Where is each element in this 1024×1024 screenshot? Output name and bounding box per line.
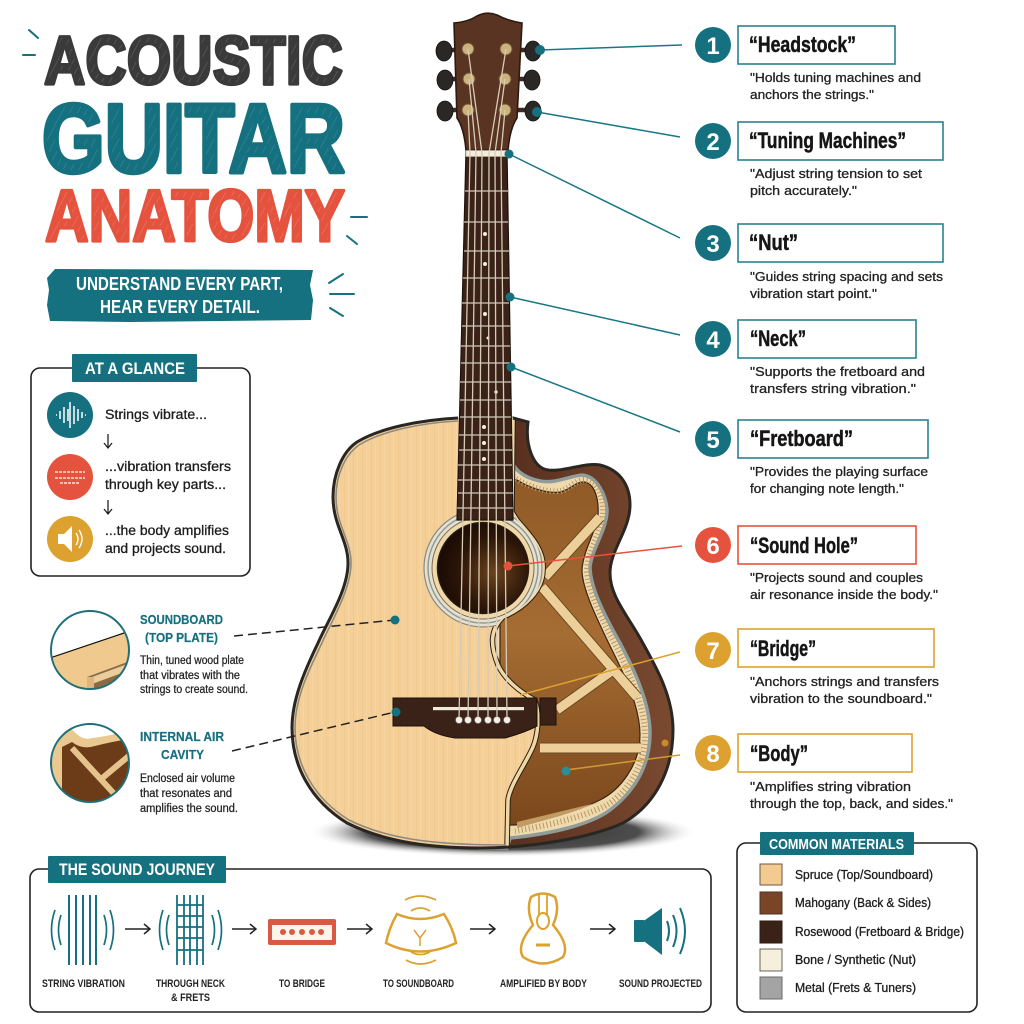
panel frame [30,869,711,1012]
lining kerf ticks [515,479,645,831]
icon: vibration transfer [47,454,93,500]
frets [457,191,513,508]
description: vibration to the soundboard." [750,691,932,706]
cavity description: Enclosed air volume [140,773,235,785]
dashed leader soundboard [234,620,395,636]
heading box [738,224,943,262]
arrow 2 [232,924,256,934]
heading: “Body” [750,741,808,766]
text: body amplifies: ...the body amplifies [105,523,229,538]
part 2: tuning machines [695,122,943,198]
swatch: metal: Metal (Frets & Tuners) [795,981,916,995]
detail ring [51,611,129,689]
soundboard cut edge [493,418,543,848]
tagline banner [47,269,313,322]
leader 6 [508,546,682,566]
soundboard heading: (TOP PLATE) [145,631,218,645]
banner text: UNDERSTAND EVERY PART, [76,274,283,294]
strings [459,49,507,720]
heading: “Fretboard” [750,426,853,451]
text: body amplifies: and projects sound. [105,541,226,556]
tuner knobs [436,41,541,121]
guitar body back and sides [292,418,673,848]
neck and fretboard [457,150,513,520]
number badge [695,27,731,63]
swatch: rosewood [760,921,964,943]
icon: string vibration [52,895,114,965]
arrow 5 [590,924,615,934]
soundboard description: Thin, tuned wood plate [140,655,244,667]
leader 7 [520,652,680,695]
banner accent ticks [329,274,354,316]
heading: “Sound Hole” [750,533,858,558]
label: through neck and frets: & FRETS [171,992,210,1004]
label: to soundboard: TO SOUNDBOARD [383,978,454,990]
description: "Adjust string tension to set [750,166,922,181]
description: "Supports the fretboard and [750,364,925,379]
part 3: nut [695,224,944,301]
leader 3 [509,154,680,238]
panel: the sound journey [30,856,711,1012]
title accent ticks [23,30,367,244]
cavity heading: CAVITY [161,748,205,762]
icon: speaker [634,908,685,955]
number badge: 8 [706,741,720,768]
icon: soundboard detail [52,632,128,688]
banner shape [47,269,313,322]
arrow 4 [470,924,495,934]
label: string vibration: STRING VIBRATION [42,978,125,990]
panel: common materials [737,832,977,1012]
icon: sound wave [47,392,93,438]
number badge: 5 [706,427,720,454]
number badge: 7 [706,638,720,665]
arrow down 2 [104,500,112,514]
heading tab [48,856,226,883]
back strip at bottom [517,802,600,828]
heading tab [760,832,914,855]
leader 2 [537,112,680,137]
part 4: neck [695,320,925,396]
number badge [695,735,731,771]
spruce soundboard [292,418,543,848]
leader 5 [511,367,680,432]
sound hole rosette [424,509,542,627]
arrow 1 [125,924,150,934]
part 1: headstock [695,26,921,102]
title line: ACOUSTIC: ACOUSTIC [44,22,343,99]
detail ring [51,724,129,802]
swatch: mahogany [760,892,931,914]
number badge [695,527,731,563]
leader 8 [566,755,680,770]
description: "Anchors strings and transfers [750,674,940,689]
swatch: metal [760,977,916,999]
headstock [436,13,541,150]
heading tab [72,354,197,382]
nut [466,150,508,156]
description: through the top, back, and sides." [750,796,953,811]
tuner shafts [452,50,525,110]
fret markers [482,232,498,461]
arrow 3 [347,924,372,934]
icon: soundboard [386,896,456,964]
number badge [695,123,731,159]
leader 1 [540,45,682,50]
interior cavity [500,478,640,825]
label: amplified by body: AMPLIFIED BY BODY [500,978,588,990]
heading box [738,734,912,772]
cavity heading: INTERNAL AIR [140,730,224,744]
description: for changing note length." [750,481,904,496]
leader 4 [510,297,680,335]
headstock plate [454,13,522,150]
soundboard description: that vibrates with the [140,670,240,682]
bridge pins [456,717,510,723]
description: "Holds tuning machines and [750,70,921,85]
cavity description: that resonates and [140,788,232,800]
bridge [393,698,556,738]
number badge: 1 [706,33,720,60]
cavity description: amplifies the sound. [140,803,238,815]
number badge [695,632,731,668]
number badge: 4 [706,327,720,354]
banner text: HEAR EVERY DETAIL. [100,297,260,317]
heading: “Headstock” [749,32,856,57]
swatch: spruce [760,864,933,885]
heading: “Bridge” [750,636,816,661]
heading: “Neck” [750,326,806,351]
leader dots [390,45,668,776]
description: "Provides the playing surface [750,464,928,479]
title line: GUITAR: GUITAR [42,84,345,193]
heading box [738,629,934,667]
swatch: spruce: Spruce (Top/Soundboard) [795,868,933,882]
icon: neck and frets [160,895,222,965]
guitar illustration [292,13,673,848]
panel: at a glance [31,354,250,576]
number badge: 3 [706,231,720,258]
description: "Guides string spacing and sets [750,269,944,284]
swatch: rosewood: Rosewood (Fretboard & Bridge) [795,925,964,939]
heading box [738,526,916,564]
heading box [738,420,928,458]
swatch: mahogany: Mahogany (Back & Sides) [795,896,931,910]
title line: ANATOMY: ANATOMY [45,176,345,257]
arrow down 1 [104,434,112,448]
number badge [695,225,731,261]
swatch: bone [760,949,916,971]
heading box [738,320,916,358]
heading: “Nut” [749,230,798,255]
text: vibration transfers: through key parts... [105,477,226,492]
heading box [738,26,895,64]
heading tab: AT A GLANCE [85,359,185,378]
panel frame [31,368,250,576]
description: "Amplifies string vibration [750,779,911,794]
icon: bridge [268,919,336,945]
title [42,22,345,257]
number badge: 6 [706,533,720,560]
number badge: 2 [706,129,720,156]
part 7: bridge [695,629,940,706]
internal braces [540,517,641,748]
body outline [292,418,673,848]
swatch: bone: Bone / Synthetic (Nut) [795,953,916,967]
leader lines [232,45,682,770]
description: transfers string vibration." [750,381,916,396]
text: strings vibrate: Strings vibrate... [105,407,207,422]
description: pitch accurately." [750,183,857,198]
callout: soundboard [50,610,248,696]
description: anchors the strings." [750,87,874,102]
part 6: sound hole [695,526,938,602]
guitar shadow [308,807,698,857]
tuner posts [462,43,512,116]
label: sound projected: SOUND PROJECTED [619,978,702,990]
description: vibration start point." [750,286,877,301]
icon: speaker [47,516,93,562]
part 8: body [695,734,953,811]
label: to bridge: TO BRIDGE [279,978,325,990]
dashed leader cavity [232,712,395,751]
text: vibration transfers: ...vibration transfers [105,459,231,474]
heading box [738,122,943,160]
sound hole [438,522,528,614]
heading tab: COMMON MATERIALS [769,836,904,853]
heading tab: THE SOUND JOURNEY [59,860,216,879]
description: "Projects sound and couples [750,570,924,585]
number badge [695,421,731,457]
soundboard heading: SOUNDBOARD [140,613,223,627]
heading: “Tuning Machines” [749,128,906,153]
soundboard description: strings to create sound. [140,684,248,696]
part 5: fretboard [695,420,928,496]
number badge [695,321,731,357]
icon: cavity detail [52,730,128,801]
panel frame [737,843,977,1012]
icon: guitar body [521,893,565,964]
callout: internal air cavity [50,723,238,815]
description: air resonance inside the body." [750,587,938,602]
label: through neck and frets: THROUGH NECK [156,978,225,990]
cutaway lining [480,418,650,848]
